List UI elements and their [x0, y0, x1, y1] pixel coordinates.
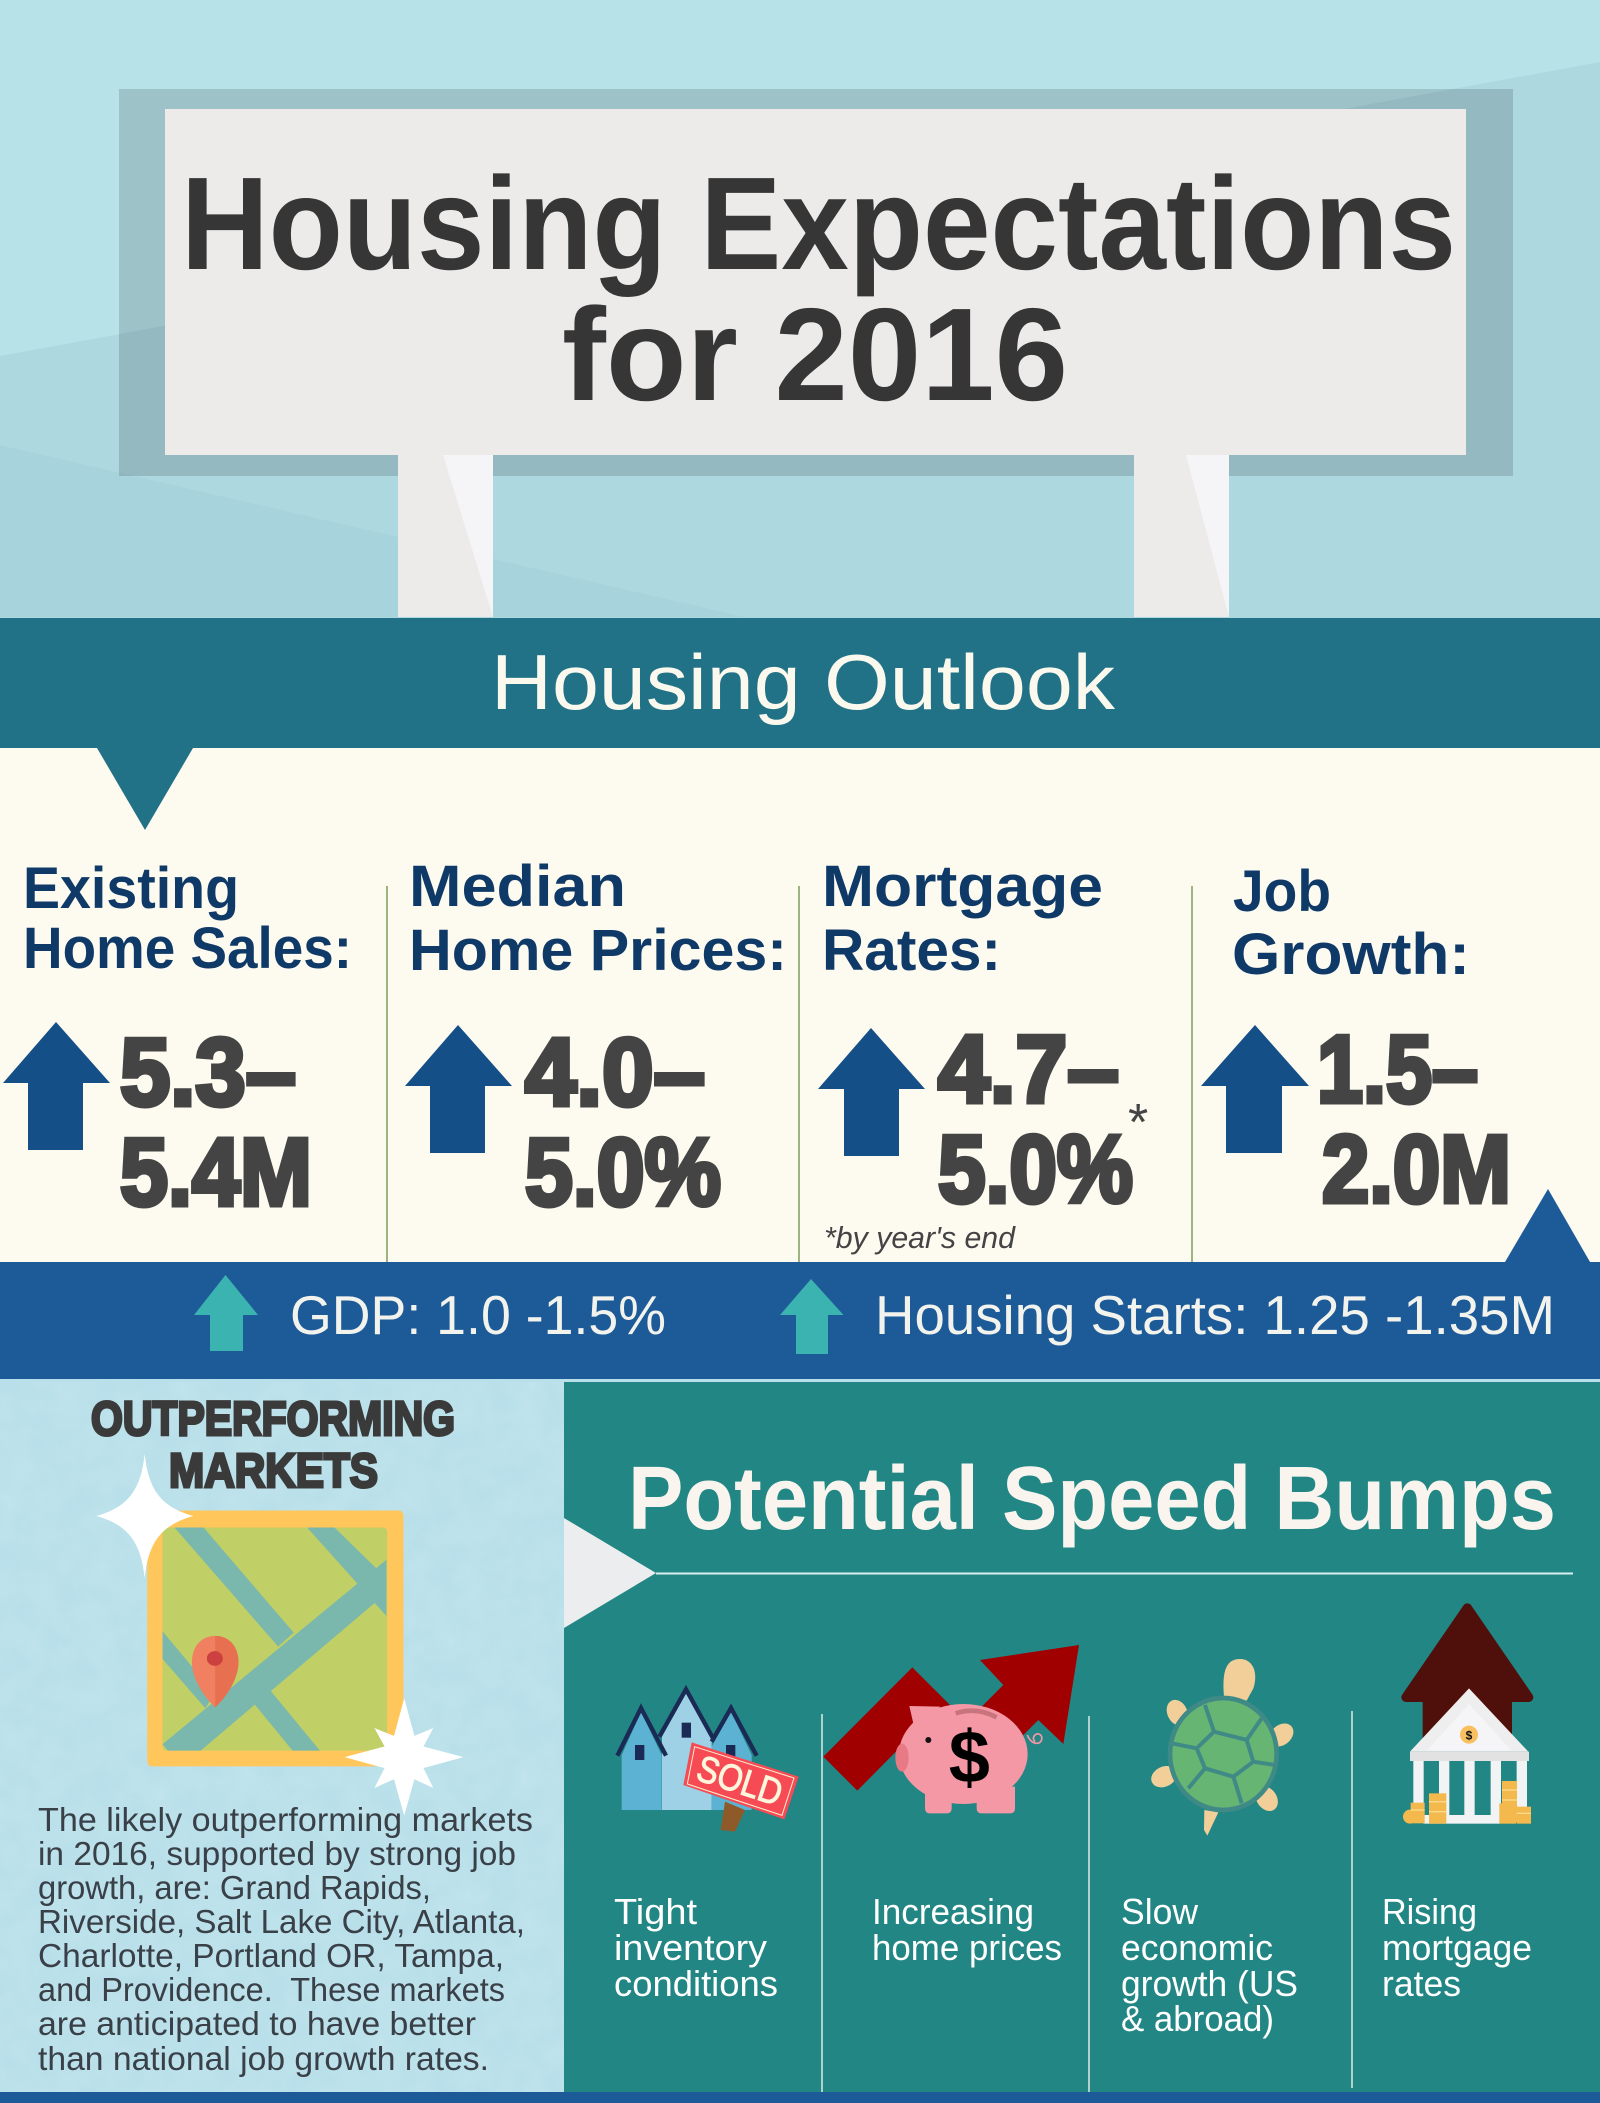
caption: Rising: [1382, 1891, 1477, 1932]
caption: inventory: [614, 1927, 767, 1968]
caption: economic: [1121, 1927, 1273, 1968]
teal arrow: housing starts: [780, 1279, 844, 1354]
white pointer triangle: [564, 1518, 656, 1628]
body text: The likely outperforming markets: [38, 1801, 533, 1838]
title: for 2016: [562, 281, 1068, 428]
icon: piggy bank and arrow: $: [949, 1716, 990, 1799]
billboard sign: [119, 89, 1513, 617]
stat: mortgage rates: *by year's end: [824, 1220, 1017, 1255]
bottom blue strip: [0, 2092, 1600, 2103]
sign board: [165, 109, 1466, 455]
stat: mortgage rates: *: [1128, 1094, 1148, 1152]
stat: median home prices: Home Prices:: [409, 918, 787, 983]
sky background: [0, 0, 1600, 620]
icon: four point sparkle: [96, 1454, 193, 1578]
caption: growth (US: [1121, 1963, 1298, 2004]
GDP and housing starts band: Housing Starts: 1.25 -1.35M: [875, 1284, 1555, 1346]
body text: Riverside, Salt Lake City, Atlanta,: [38, 1903, 525, 1940]
up arrow: [3, 1022, 110, 1150]
caption: conditions: [614, 1963, 778, 2004]
up arrow: [405, 1025, 512, 1153]
stat: existing home sales: 5.4M: [120, 1119, 312, 1226]
stat: job growth: [1201, 859, 1511, 1223]
heading: MARKETS: [169, 1445, 378, 1498]
caption: Increasing: [872, 1891, 1034, 1932]
stat: mortgage rates: 4.7–: [938, 1016, 1119, 1123]
stat: median home prices: [405, 854, 787, 1226]
caption: rates: [1382, 1963, 1461, 2004]
stat: job growth: Growth:: [1232, 922, 1470, 987]
panel: outperforming markets: [0, 1379, 1600, 2092]
title: Housing Expectations: [181, 150, 1456, 297]
caption: Tight: [614, 1891, 697, 1932]
sign posts: [398, 455, 1229, 617]
cream outlook panel: [0, 748, 1600, 1262]
stat: mortgage rates: [818, 854, 1148, 1255]
icon: turtle: [1148, 1659, 1298, 1836]
body text: than national job growth rates.: [38, 2040, 489, 2077]
caption: & abroad): [1121, 1998, 1274, 2039]
sign frame: [119, 89, 1513, 476]
stat: existing home sales: Existing: [23, 856, 239, 921]
icon: bank with rising arrow: $: [1466, 1728, 1473, 1742]
caption: Slow: [1121, 1891, 1199, 1932]
caption: [872, 1891, 1062, 1968]
stat: mortgage rates: Mortgage: [822, 854, 1103, 919]
GDP and housing starts band: GDP: 1.0 -1.5%: [290, 1284, 666, 1346]
body text: in 2016, supported by strong job: [38, 1835, 516, 1872]
caption: home prices: [872, 1927, 1062, 1968]
caption: [614, 1891, 778, 2004]
body text: and Providence. These markets: [38, 1971, 505, 2008]
housing outlook banner: Housing Outlook: [491, 638, 1116, 726]
body text: Charlotte, Portland OR, Tampa,: [38, 1937, 504, 1974]
caption: [1382, 1891, 1532, 2004]
body text: [38, 1801, 533, 2077]
stat: existing home sales: [3, 856, 352, 1226]
caption: mortgage: [1382, 1927, 1532, 1968]
caption: [1121, 1891, 1298, 2039]
body text: are anticipated to have better: [38, 2005, 476, 2042]
bump: slow economic growth: [1121, 1659, 1298, 2039]
stat: job growth: 1.5–: [1317, 1016, 1478, 1123]
stat: median home prices: 4.0–: [525, 1019, 705, 1126]
stat: existing home sales: 5.3–: [120, 1019, 296, 1126]
icon: eight point sparkle: [345, 1698, 463, 1816]
icon: bank with rising arrow: [1403, 1608, 1531, 1824]
column dividers: [387, 886, 1192, 1262]
bump: rising mortgage rates: [1382, 1608, 1532, 2004]
icon: piggy bank and arrow: [823, 1645, 1079, 1813]
up arrow: [1201, 1025, 1309, 1153]
stat: existing home sales: Home Sales:: [23, 916, 352, 981]
stat: mortgage rates: 5.0%: [938, 1116, 1133, 1223]
up arrow: [818, 1028, 925, 1156]
title: [181, 150, 1456, 428]
stat: median home prices: 5.0%: [525, 1119, 721, 1226]
stat: median home prices: Median: [409, 854, 626, 919]
body text: growth, are: Grand Rapids,: [38, 1869, 431, 1906]
stat: mortgage rates: Rates:: [822, 918, 1001, 983]
housing outlook banner: [0, 618, 1600, 830]
teal arrow: GDP: [194, 1275, 258, 1351]
icon: map: [96, 1454, 463, 1816]
stat: job growth: 2.0M: [1322, 1116, 1511, 1223]
GDP and housing starts band: [0, 1189, 1600, 1379]
column dividers: [822, 1711, 1352, 2092]
stat: job growth: Job: [1233, 859, 1331, 924]
heading: [91, 1393, 455, 1498]
icon: houses with sold sign: [617, 1689, 799, 1832]
heading: OUTPERFORMING: [91, 1393, 455, 1446]
bump: increasing home prices: [823, 1645, 1079, 1968]
panel: potential speed bumps: [564, 1382, 1600, 2092]
bump: tight inventory: [614, 1689, 799, 2004]
icon: houses with sold sign: SOLD: [692, 1747, 788, 1814]
